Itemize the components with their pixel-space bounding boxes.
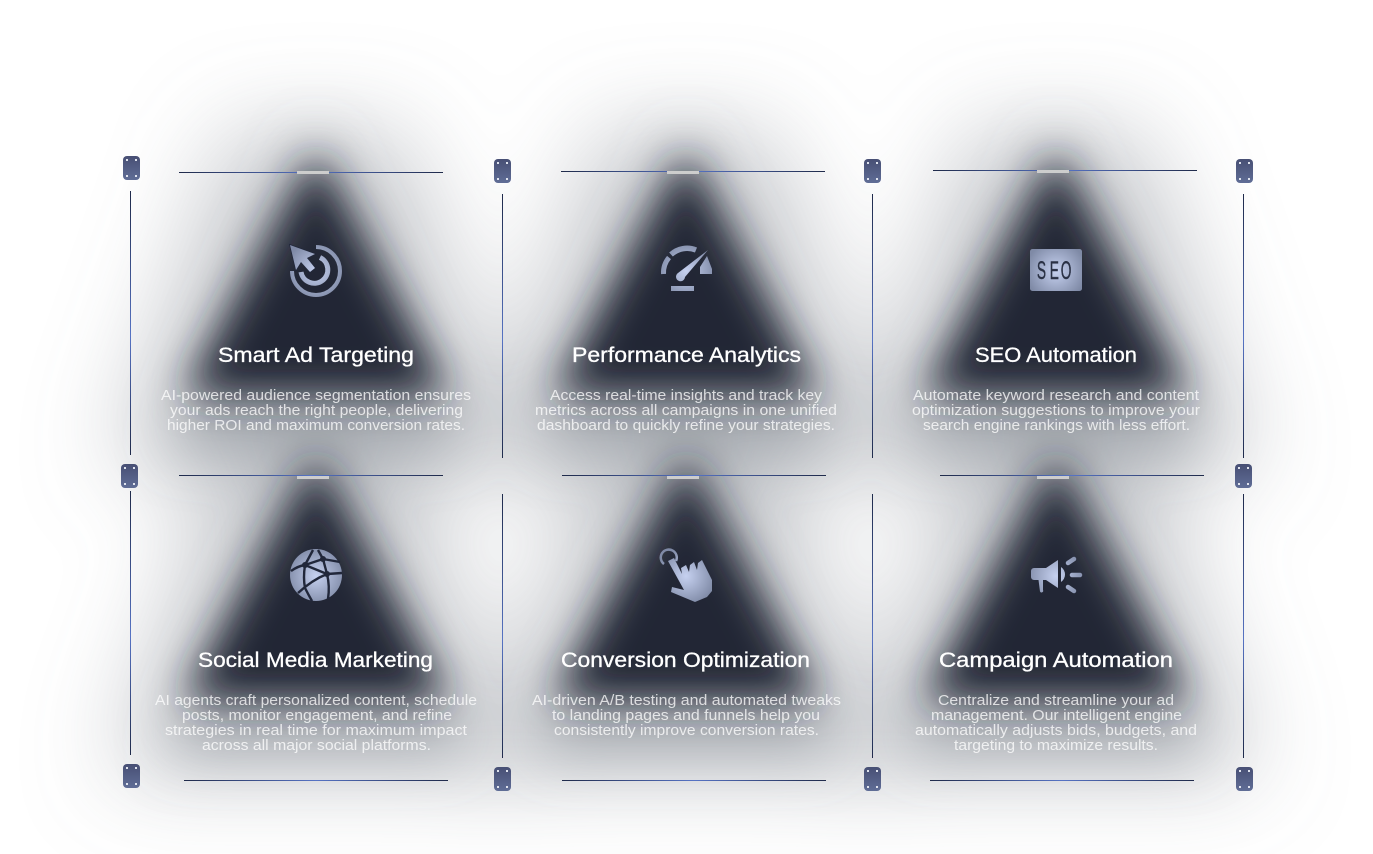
description: AI agents craft personalized content, schedule xyxy=(155,693,477,709)
heading: Performance Analytics xyxy=(572,344,801,367)
heading: SEO Automation xyxy=(975,344,1137,367)
icon: target arrow xyxy=(290,245,340,295)
handles xyxy=(297,170,1069,479)
description: optimization suggestions to improve your xyxy=(912,403,1200,419)
panel: Smart Ad Targeting xyxy=(161,245,471,434)
description xyxy=(912,388,1200,434)
background glow xyxy=(110,130,1260,775)
panel: Campaign Automation xyxy=(915,559,1197,754)
panel: Social Media Marketing xyxy=(155,549,477,754)
icon: speedometer xyxy=(663,248,712,291)
panel: Conversion Optimization xyxy=(532,550,841,739)
description: across all major social platforms. xyxy=(202,738,431,754)
description: management. Our intelligent engine xyxy=(931,708,1182,724)
heading: Campaign Automation xyxy=(939,649,1173,672)
description: Automate keyword research and content xyxy=(913,388,1199,404)
description: automatically adjusts bids, budgets, and xyxy=(915,723,1197,739)
description xyxy=(532,693,841,739)
frame lines xyxy=(130,170,1244,781)
description xyxy=(915,693,1197,754)
description: consistently improve conversion rates. xyxy=(554,723,819,739)
panel: SEO Automation xyxy=(912,249,1200,434)
description: dashboard to quickly refine your strategies. xyxy=(537,418,835,434)
panel: Performance Analytics xyxy=(535,248,837,434)
description: AI-powered audience segmentation ensures xyxy=(161,388,471,404)
heading: Social Media Marketing xyxy=(198,649,433,672)
description: your ads reach the right people, delivering xyxy=(170,403,463,419)
description: Access real-time insights and track key xyxy=(550,388,823,404)
icon: megaphone xyxy=(1031,559,1080,592)
description xyxy=(161,388,471,434)
description xyxy=(155,693,477,754)
description: Centralize and streamline your ad xyxy=(938,693,1174,709)
icon: tapping hand xyxy=(661,550,712,602)
description: posts, monitor engagement, and refine xyxy=(182,708,452,724)
description: AI-driven A/B testing and automated tweaks xyxy=(532,693,841,709)
description: targeting to maximize results. xyxy=(954,738,1158,754)
corner screws xyxy=(121,156,1253,791)
description: metrics across all campaigns in one unified xyxy=(535,403,837,419)
icon: SEO badge: SEO xyxy=(1037,258,1071,285)
description: strategies in real time for maximum impact xyxy=(165,723,467,739)
description xyxy=(535,388,837,434)
icon: network globe xyxy=(290,549,342,601)
description: higher ROI and maximum conversion rates. xyxy=(167,418,465,434)
description: search engine rankings with less effort. xyxy=(923,418,1190,434)
heading: Conversion Optimization xyxy=(561,649,810,672)
icon: SEO badge xyxy=(1030,249,1082,291)
heading: Smart Ad Targeting xyxy=(218,344,414,367)
description: to landing pages and funnels help you xyxy=(552,708,820,724)
